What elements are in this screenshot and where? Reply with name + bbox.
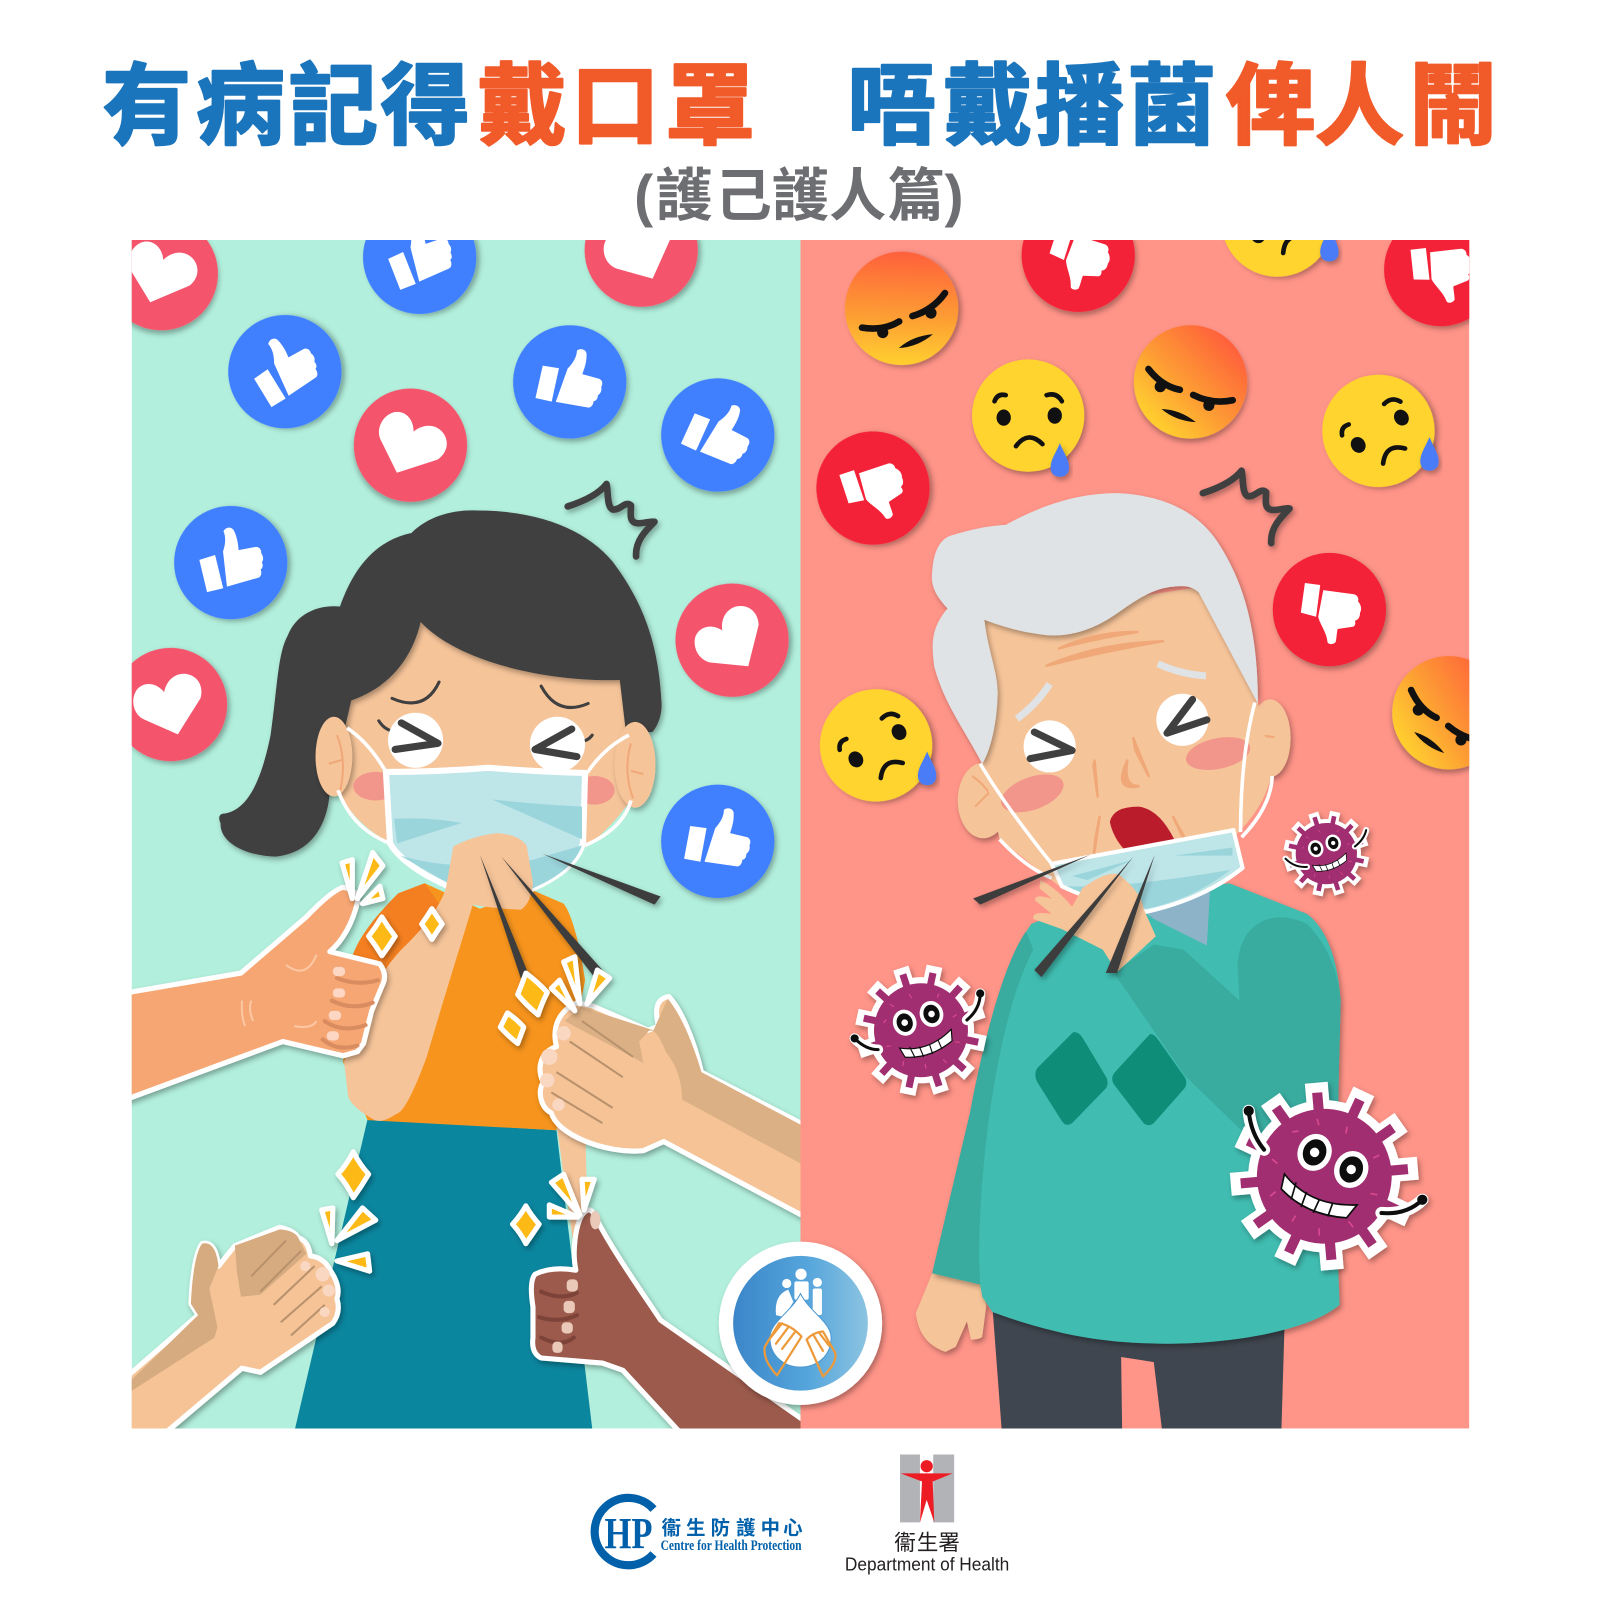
hair (932, 493, 1258, 764)
shirt (343, 883, 585, 1130)
hand: thumbs up, light tan (123, 887, 384, 1101)
open mouth (1110, 807, 1174, 851)
subtitle: (護己護人篇) (634, 164, 964, 228)
left eye (1024, 720, 1076, 772)
hand: thumbs up, dark brown (531, 1210, 817, 1435)
reaction icons: dislikes and emojis (797, 143, 1528, 822)
reaction icons: likes and hearts (86, 179, 809, 898)
collar (1144, 890, 1210, 945)
trousers (992, 1307, 1284, 1429)
arm and fist (344, 833, 533, 1121)
face (982, 587, 1272, 888)
virus: medium (847, 956, 995, 1104)
logo: Centre for Health Protection: Centre for Health Protection (661, 1538, 802, 1554)
panel: good behaviour, mint background (132, 240, 800, 1428)
title: 有病記得 (102, 57, 470, 156)
sweater right sleeve shading (1114, 918, 1341, 1134)
face (341, 622, 628, 848)
face mask (386, 768, 585, 896)
shirt sleeve (353, 883, 439, 969)
cough lines (973, 855, 1155, 977)
right eye (1156, 694, 1208, 746)
character: woman coughing into her hand (123, 510, 817, 1435)
far arm (557, 1126, 586, 1238)
argyle diamonds (1035, 1032, 1186, 1125)
right eye (530, 717, 585, 772)
squiggle: annoyance mark (1203, 471, 1290, 543)
left ear (316, 717, 352, 796)
badge: hygiene logo (719, 1242, 882, 1405)
hair (219, 510, 662, 857)
title (102, 57, 1498, 156)
left eye (388, 713, 443, 768)
hand: clapping, bottom left (123, 1227, 338, 1435)
icon: people (776, 1269, 822, 1317)
title: 俾人鬧 (1226, 57, 1498, 156)
ears (958, 763, 1009, 838)
sparkles (322, 853, 610, 1271)
logo: Department of Health (845, 1454, 1009, 1575)
cheeks (996, 732, 1253, 820)
panel: bad behaviour, coral background (800, 240, 1470, 1428)
logo: Centre for Health Protection: 衞生防護中心 (662, 1517, 803, 1540)
icon: water drop (770, 1294, 831, 1367)
skirt (295, 1119, 592, 1428)
squiggle: annoyance mark (568, 484, 654, 556)
sweater left sleeve shading (932, 931, 1033, 1284)
logo: Department of Health: Department of Health (845, 1554, 1009, 1575)
logo: Department of Health: 衞生署 (894, 1531, 960, 1555)
title: 戴口罩 (478, 57, 755, 156)
title: 唔戴播菌 (847, 57, 1216, 156)
mask straps (980, 702, 1272, 878)
virus: small (1278, 805, 1375, 902)
mask straps (338, 728, 631, 845)
sweater body (932, 883, 1341, 1344)
icon: washing hands (765, 1323, 835, 1376)
cough lines (480, 854, 661, 978)
character: elderly man coughing (916, 493, 1341, 1429)
hand at side (916, 1273, 986, 1352)
face mask (1052, 830, 1243, 912)
right ear (615, 722, 656, 808)
cheeks (353, 772, 615, 805)
eyebrows (1017, 664, 1206, 719)
eyebrows (379, 682, 592, 741)
hand: clapping, top right (540, 997, 817, 1223)
logo: Centre for Health Protection (595, 1498, 803, 1565)
wrinkles (1047, 632, 1195, 863)
hand at mouth (1033, 874, 1156, 972)
logo: Centre for Health Protection: HP (604, 1508, 652, 1558)
virus: large (1212, 1064, 1436, 1288)
